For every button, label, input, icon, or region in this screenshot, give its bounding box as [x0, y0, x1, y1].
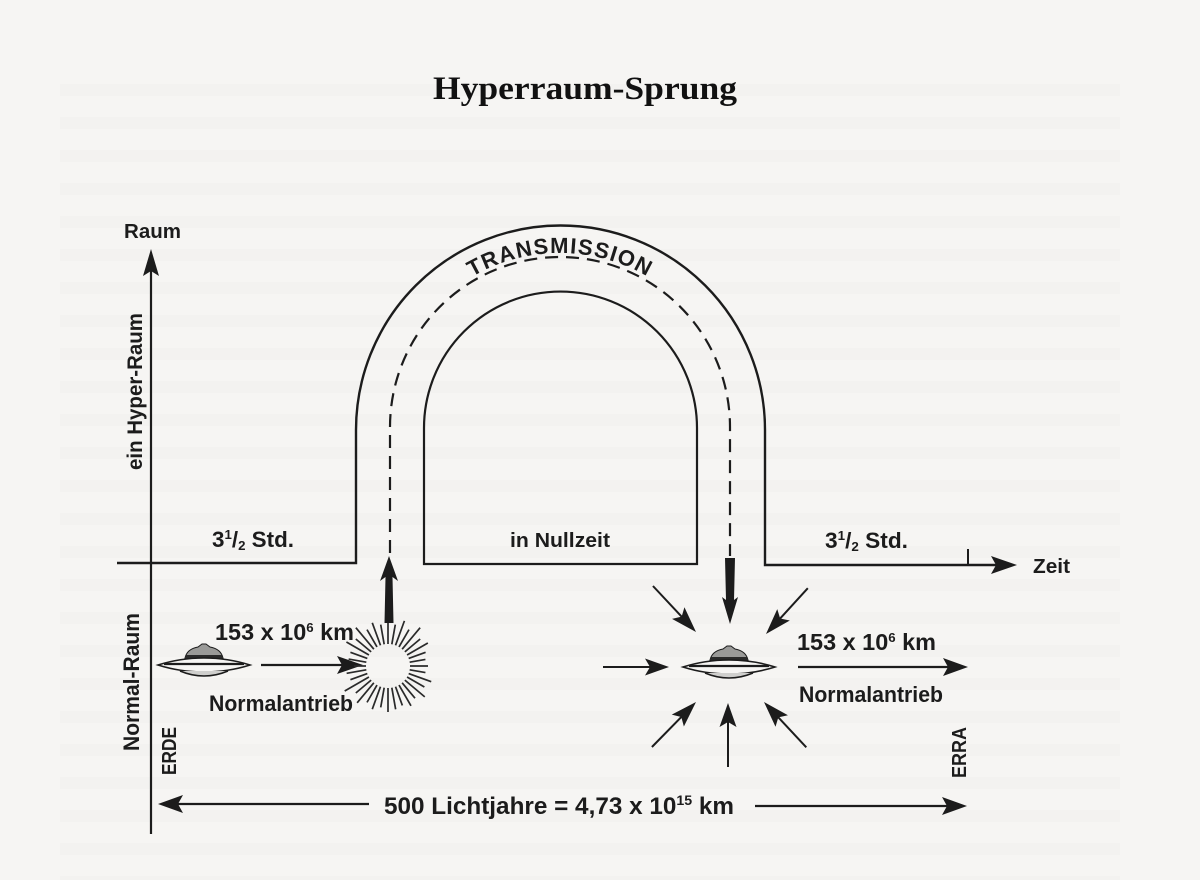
- time axis arrowhead: [991, 556, 1017, 574]
- arrow: departing saucer toward Erra: [798, 658, 968, 676]
- arrow: thick downward exit from hyperspace: [722, 558, 738, 624]
- left distance label: 6: [306, 620, 314, 635]
- left drive label: Normalantrieb: [209, 691, 353, 716]
- arrow: total distance rightward: [755, 797, 967, 815]
- left distance label: km: [314, 619, 354, 645]
- right distance label: 6: [888, 630, 896, 645]
- axis label: ein Hyper-Raum: ein Hyper-Raum: [124, 313, 147, 470]
- arrow: from south-west: [646, 696, 702, 753]
- label: left duration: /: [232, 527, 238, 552]
- title: Hyperraum-Sprung: [433, 71, 738, 107]
- label: right duration: 1: [838, 528, 845, 543]
- arrow: from west: [603, 658, 669, 676]
- arrow: from south-east: [758, 696, 813, 753]
- arrow: total distance leftward: [158, 795, 369, 813]
- left distance label: 153 x 10: [215, 619, 305, 645]
- right distance label: km: [896, 629, 936, 655]
- label: ERRA: ERRA: [949, 727, 971, 778]
- icon: saucer at Erra: [683, 646, 775, 678]
- label: right duration: 2: [851, 539, 859, 554]
- label: ERDE: ERDE: [159, 727, 181, 775]
- hyperspace tunnel outer line with time axis: [117, 226, 1000, 565]
- label: left duration: 3: [212, 527, 224, 552]
- label: right duration: /: [845, 528, 851, 553]
- axis label: Normal-Raum: Normal-Raum: [119, 613, 144, 751]
- right drive label: Normalantrieb: [799, 682, 943, 707]
- dashed transmission path: [390, 257, 730, 556]
- label: left duration: 1: [224, 527, 232, 542]
- arrow: thick upward entry into hyperspace: [380, 556, 398, 623]
- arrow: from south: [720, 703, 736, 767]
- icon: saucer at Earth: [158, 644, 250, 676]
- curved label: TRANSMISSION: TRANSMISSION: [465, 238, 653, 276]
- converging arrows around arrival point: [603, 580, 814, 767]
- arrow: from north-west: [647, 580, 702, 638]
- arrow: from north-east: [760, 582, 814, 640]
- arrow: saucer to jump point: [261, 656, 363, 674]
- label: right duration: 3: [825, 528, 837, 553]
- axis label: Raum: Raum: [124, 221, 181, 243]
- vertical axis: Raum: [143, 249, 159, 834]
- total distance label: km: [692, 793, 734, 820]
- total distance label: 15: [676, 792, 692, 808]
- label: in Nullzeit: in Nullzeit: [510, 530, 610, 552]
- label: right duration: Std.: [859, 528, 908, 553]
- icon: starburst jump point: [345, 620, 431, 712]
- axis label: Zeit: Zeit: [1033, 556, 1070, 578]
- time axis tick: [967, 549, 969, 565]
- label: left duration: Std.: [245, 527, 294, 552]
- total distance label: 500 Lichtjahre = 4,73 x 10: [384, 793, 673, 820]
- label: left duration: 2: [238, 538, 245, 553]
- right distance label: 153 x 10: [797, 629, 887, 655]
